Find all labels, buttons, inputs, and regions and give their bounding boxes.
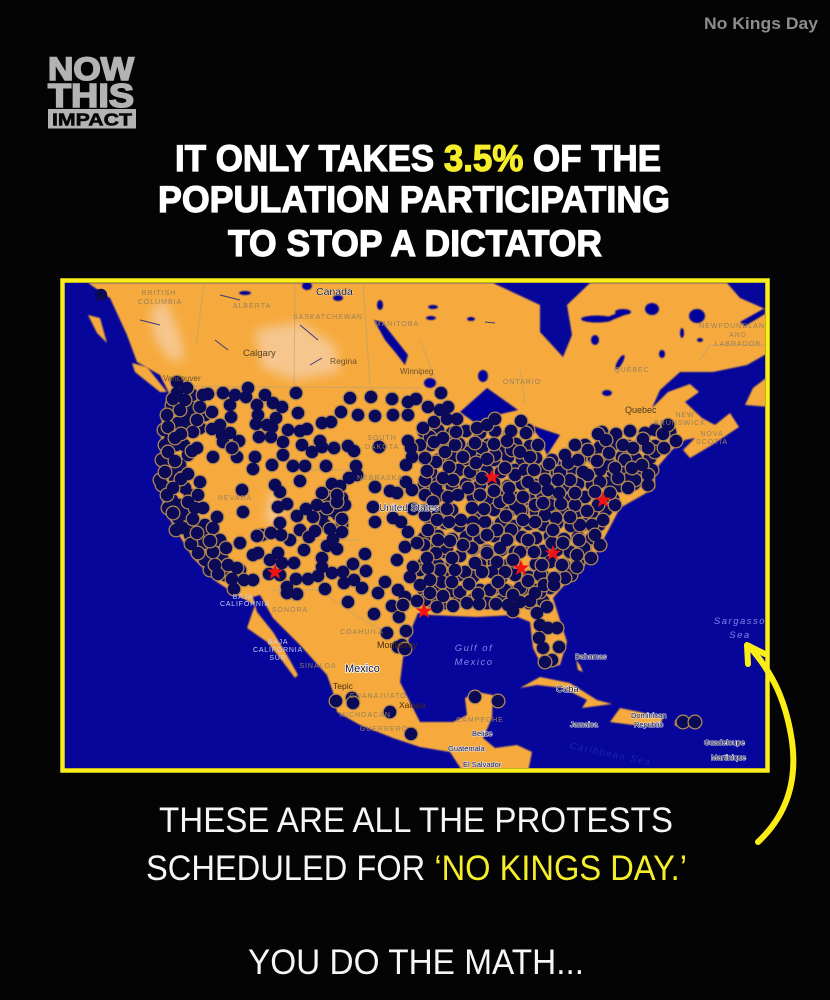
map labels: Caribbean: Bahamas — [575, 652, 607, 661]
map labels: provinces and states: SINALOA — [299, 663, 337, 670]
map labels: Baja: CALIFORNIA — [220, 601, 270, 608]
map labels: Baja: BAJA — [233, 594, 253, 601]
logo: NowThis Impact — [48, 51, 136, 130]
map labels: cities and countries: Tepic — [333, 681, 354, 691]
map labels: seas: Mexico — [454, 657, 494, 668]
map labels: provinces and states: MICHOACÁN — [339, 710, 391, 719]
map labels: provinces and states: MANITOBA — [375, 321, 419, 328]
caption: THESE ARE ALL THE PROTESTS — [159, 801, 673, 840]
map labels: provinces and states: DAKOTA — [365, 444, 399, 451]
rivers and borders — [175, 283, 770, 632]
map panel — [62, 280, 771, 772]
land: prairie highlights — [150, 300, 340, 530]
map labels: cities and countries: Canada — [316, 286, 353, 298]
map labels: provinces and states: SONORA — [272, 607, 308, 614]
arrow: curved yellow pointing to the map — [747, 645, 793, 842]
map labels: cities and countries: Cuba — [556, 684, 579, 695]
protest dots — [101, 295, 695, 734]
logo: NowThis Impact: NOW — [48, 51, 135, 87]
map labels: provinces and states: QUÉBEC — [614, 365, 650, 374]
map labels: Caribbean: El Salvador — [463, 760, 502, 769]
map labels: provinces and states: ONTARIO — [503, 379, 541, 386]
map labels: provinces and states: NEVADA — [218, 495, 252, 502]
title — [158, 138, 670, 264]
map labels: Caribbean: Dominican — [631, 711, 666, 720]
map labels: cities and countries: Mexico — [345, 663, 380, 675]
map labels: seas: Sargasso — [714, 616, 766, 627]
map labels: Caribbean: Martinique — [711, 753, 746, 762]
land: North America — [88, 283, 770, 772]
map labels: seas: Caribbean Sea — [569, 741, 652, 769]
map labels: Caribbean — [448, 652, 746, 769]
title: TO STOP A DICTATOR — [228, 223, 602, 264]
map labels: cities and countries: United States — [379, 503, 439, 514]
map labels: provinces and states — [138, 290, 771, 733]
map labels: provinces and states: AND — [729, 332, 747, 339]
map labels: cities and countries: Monterrey — [377, 640, 418, 650]
map labels: seas — [454, 616, 766, 769]
red stars: major protests — [267, 469, 611, 618]
map labels: seas: Sea — [729, 630, 751, 641]
map labels: Baja: SUR — [269, 655, 287, 662]
map labels: provinces and states: NEWFOUNDLAND — [699, 323, 771, 330]
islands — [88, 315, 770, 726]
map labels: Baja: CALIFORNIA — [253, 647, 303, 654]
map labels: provinces and states: SCOTIA — [696, 439, 728, 446]
map labels: provinces and states: SOUTH — [367, 435, 397, 442]
Great Lakes and inland water — [239, 282, 765, 470]
map labels: provinces and states: LABRADOR — [715, 341, 761, 348]
closing line: YOU DO THE MATH... — [248, 943, 584, 982]
map labels: cities and countries: Regina — [330, 356, 357, 366]
title: POPULATION PARTICIPATING — [158, 179, 670, 220]
map labels: Baja: BAJA — [268, 639, 288, 646]
caption: SCHEDULED FOR ‘NO KINGS DAY.’ — [146, 849, 687, 888]
map labels: provinces and states: CAMPECHE — [456, 717, 504, 724]
source tag: No Kings Day: No Kings Day — [704, 14, 819, 33]
map labels: provinces and states: NEW — [675, 412, 695, 419]
map labels: cities and countries: Winnipeg — [400, 367, 433, 376]
map labels: cities and countries: Quebec — [625, 405, 657, 415]
map labels: provinces and states: SASKATCHEWAN — [293, 314, 363, 321]
title: IT ONLY TAKES 3.5% OF THE — [175, 138, 661, 179]
map labels: provinces and states: BRITISH — [142, 290, 176, 297]
map labels: Caribbean: Republic — [634, 720, 663, 729]
map labels: Caribbean: Jamaica — [570, 720, 599, 729]
map labels: Baja — [220, 594, 303, 662]
map border — [62, 280, 768, 770]
map labels: Caribbean: Guatemala — [448, 744, 486, 753]
map labels: cities and countries: Xalapa — [399, 700, 426, 710]
logo: NowThis Impact: THIS — [48, 77, 134, 114]
map labels: cities and countries: Vancouver — [163, 374, 201, 383]
map labels: seas: Gulf of — [455, 643, 493, 654]
logo: NowThis Impact: IMPACT — [52, 110, 132, 130]
map labels: provinces and states: NEBRASKA — [357, 475, 403, 482]
map labels: cities and countries — [163, 286, 657, 710]
map labels: provinces and states: ALBERTA — [233, 303, 271, 310]
map labels: Caribbean: Belize — [472, 729, 492, 738]
caption — [146, 801, 687, 888]
map labels: provinces and states: GUANAJUATO — [349, 693, 407, 700]
map labels: Caribbean: Guadeloupe — [704, 738, 745, 747]
map labels: cities and countries: Calgary — [243, 348, 276, 359]
map labels: provinces and states: BRUNSWICK — [654, 420, 706, 427]
map labels: provinces and states: COAHUILA — [340, 629, 384, 636]
map labels: provinces and states: GUERRERO — [360, 726, 408, 733]
map labels: provinces and states: NOVA — [700, 431, 724, 438]
map labels: provinces and states: COLUMBIA — [138, 299, 182, 306]
